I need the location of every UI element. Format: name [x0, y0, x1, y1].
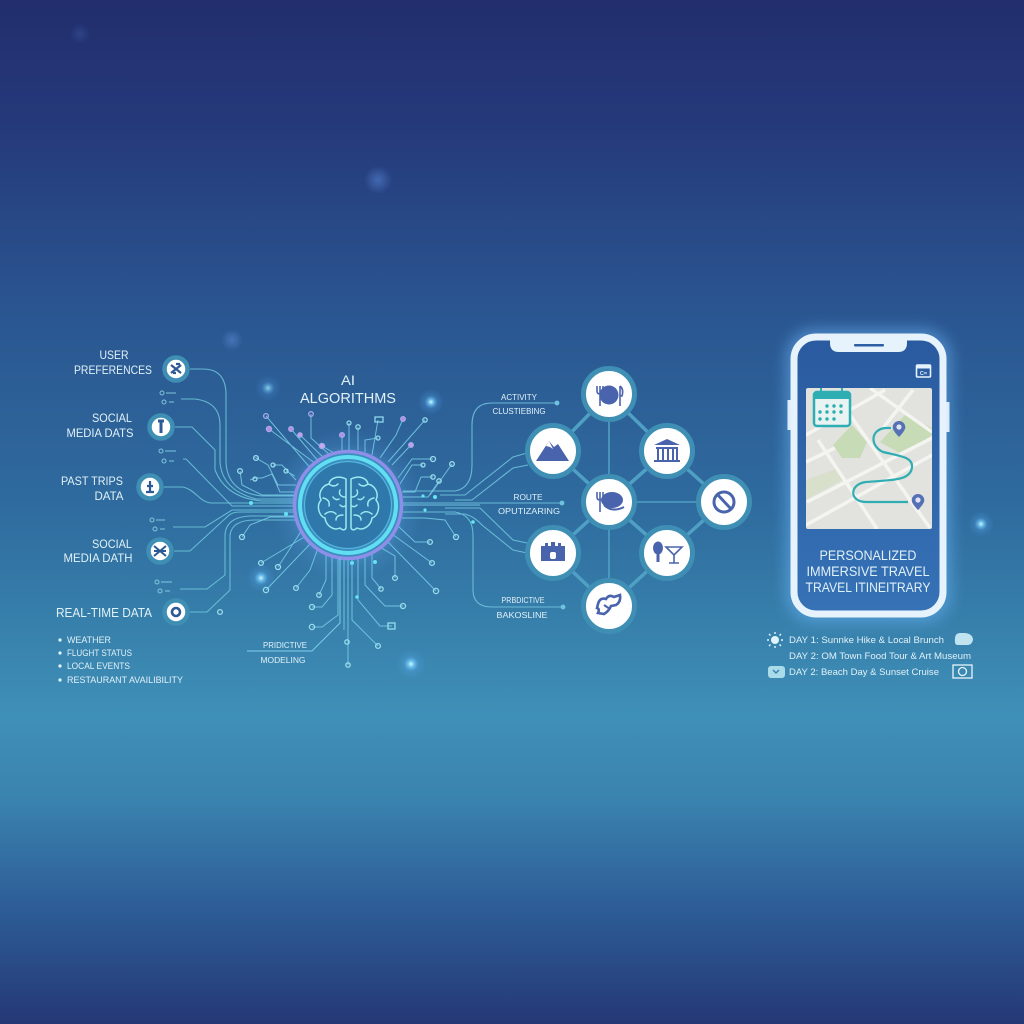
node: dining: [584, 368, 634, 420]
network labels: OPUTIZARING: [498, 507, 560, 516]
input: social media: MEDIA DATS: [66, 426, 134, 440]
real-time data list: RESTAURANT AVAILIBILITY: [67, 675, 183, 685]
connector end dots: [555, 401, 565, 609]
input: social media 2: SOCIAL: [92, 537, 132, 551]
input: past trips: PAST TRIPS: [61, 474, 123, 488]
network labels: [492, 393, 560, 620]
AI algorithms title: AI: [341, 372, 355, 388]
node: mountain: [528, 426, 578, 476]
phone title: IMMERSIVE TRAVEL: [806, 563, 930, 579]
trace end nodes: [218, 412, 475, 667]
node: compass: [698, 476, 750, 528]
phone title: [806, 547, 931, 595]
small data stubs: [150, 391, 176, 593]
AI algorithms title: [300, 372, 396, 407]
input: real-time data: REAL-TIME DATA: [56, 606, 153, 620]
predictive modeling label: [247, 558, 340, 665]
input: social media 2: MEDIA DATH: [64, 551, 132, 565]
network labels: PRBDICTIVE: [502, 596, 544, 605]
input: past trips: DATA: [94, 489, 124, 503]
real-time data list: LOCAL EVENTS: [67, 661, 130, 671]
phone title: PERSONALIZED: [820, 547, 916, 563]
input: user preferences: PREFERENCES: [74, 363, 152, 377]
activity network: [528, 368, 750, 632]
day itinerary list: DAY 2: Beach Day & Sunset Cruise: [789, 667, 939, 678]
network labels: CLUSTIEBING: [492, 407, 546, 416]
side buttons: [789, 400, 948, 432]
real-time data list: WEATHER: [67, 635, 111, 645]
predictive modeling label: PRIDICTIVE: [263, 640, 307, 650]
phone title: TRAVEL ITINEITRARY: [806, 579, 931, 595]
real-time data list: FLUGHT STATUS: [67, 648, 132, 658]
icon: sun: [767, 632, 783, 648]
icon: calendar: [814, 388, 850, 426]
connector lines from inputs to brain: [164, 369, 296, 612]
day itinerary list: DAY 1: Sunnke Hike & Local Brunch: [789, 635, 944, 646]
brain core: [272, 429, 424, 581]
map pins: [893, 421, 924, 510]
network links: [553, 394, 724, 606]
icon: camera: [953, 665, 972, 678]
icon: small calendar: C=: [920, 371, 927, 377]
day itinerary list: [767, 632, 973, 678]
AI algorithms title: ALGORITHMS: [300, 391, 396, 407]
input: social media 2: [64, 537, 172, 565]
notch: [830, 338, 907, 352]
radial circuit traces: [240, 414, 480, 665]
input: real-time data: [56, 600, 188, 624]
network labels: ROUTE: [514, 492, 543, 502]
input: user preferences: USER: [100, 348, 129, 362]
node: food: [584, 476, 634, 528]
node: cocktail: [642, 528, 692, 578]
network labels: BAKOSLINE: [496, 611, 548, 620]
glowing particles: [70, 24, 994, 679]
icon: brain: [318, 477, 379, 530]
icon: cloud camera: [955, 633, 973, 645]
route: [853, 428, 912, 502]
icon: suitcase: [768, 666, 785, 678]
real-time data list: [58, 635, 183, 685]
bright trace dots: [249, 494, 475, 599]
input: social media: [66, 411, 172, 440]
node: museum: [642, 426, 692, 476]
predictive modeling label: MODELING: [260, 655, 306, 665]
input: user preferences: [74, 348, 188, 380]
icon: small calendar: [916, 365, 930, 377]
input: past trips: [61, 474, 162, 503]
node: castle: [528, 528, 578, 578]
map: [806, 388, 932, 529]
node: map: [584, 580, 634, 632]
network labels: ACTIVITY: [501, 393, 538, 402]
input: social media: SOCIAL: [92, 411, 132, 425]
phone: [785, 328, 952, 623]
connectors to itinerary network: [403, 403, 563, 607]
left data inputs: [56, 348, 296, 685]
day itinerary list: DAY 2: OM Town Food Tour & Art Museum: [789, 651, 971, 662]
